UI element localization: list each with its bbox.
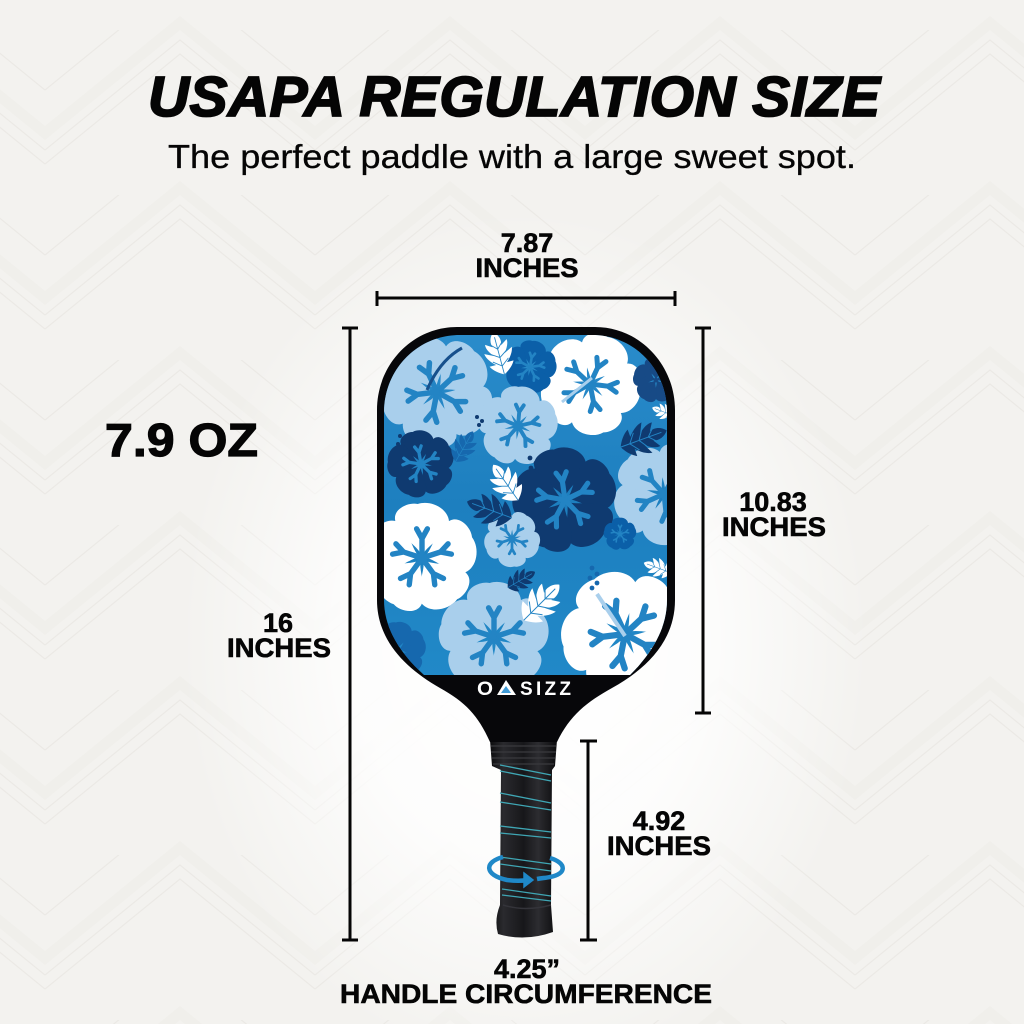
mid-blue small flower xyxy=(604,518,636,550)
dimension: handle circumference: HANDLE CIRCUMFERENCE xyxy=(340,979,712,1009)
white flower bottom-right xyxy=(561,572,667,675)
dimension: face height: 10.83 xyxy=(739,487,807,517)
brand logo: SIZZ xyxy=(520,679,571,700)
brand band xyxy=(380,675,672,685)
dimension: face width xyxy=(377,228,675,306)
paddle frame xyxy=(377,327,675,742)
dimension: handle length: 4.92 xyxy=(633,806,685,836)
white flower top-right xyxy=(540,335,640,435)
dimension: handle circumference xyxy=(340,954,712,1009)
light small flower xyxy=(484,512,540,568)
light flower bottom xyxy=(438,582,549,675)
dimension: total length: INCHES xyxy=(227,633,331,663)
leaf cluster xyxy=(451,335,667,622)
navy flower top-right xyxy=(633,359,666,402)
dimension: face height xyxy=(695,328,826,713)
title: USAPA REGULATION SIZE xyxy=(148,65,882,129)
dimension: total length: 16 xyxy=(263,608,293,638)
dimension: face width: 7.87 xyxy=(501,228,553,258)
pollen dots xyxy=(396,415,599,590)
dimension: face width: INCHES xyxy=(476,253,578,283)
handle grip xyxy=(490,740,557,938)
brand logo xyxy=(477,679,571,700)
brand logo: O xyxy=(477,679,493,700)
paddle face: hibiscus pattern xyxy=(384,335,667,675)
mid-blue flower bottom-left xyxy=(388,622,426,670)
navy flower centre xyxy=(512,447,616,552)
dimension: handle length xyxy=(580,741,711,940)
dimension: total length xyxy=(227,328,358,940)
subtitle: The perfect paddle with a large sweet spot. xyxy=(168,138,856,175)
pistil top-left xyxy=(427,348,462,390)
white flower left xyxy=(384,502,477,611)
mid-blue flower top xyxy=(506,340,557,393)
pistil top-right xyxy=(562,378,592,402)
icon: rotation arrow around handle xyxy=(489,857,563,887)
light flower centre xyxy=(480,386,558,464)
dimension: handle circumference: 4.25” xyxy=(494,954,560,984)
dimension: handle length: INCHES xyxy=(607,831,711,861)
paddle xyxy=(377,327,675,938)
pistil bottom-right xyxy=(597,594,625,636)
dimension: face height: INCHES xyxy=(722,512,826,542)
light flower right xyxy=(614,444,667,546)
navy flower left xyxy=(387,430,454,498)
light flower top-left xyxy=(384,338,492,446)
weight label: 7.9 OZ xyxy=(105,414,258,466)
